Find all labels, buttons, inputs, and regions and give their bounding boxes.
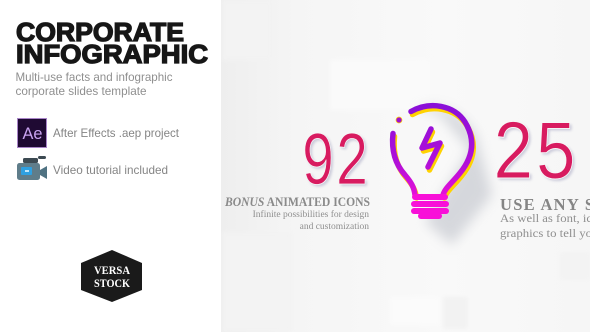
number 92: 92: [301, 121, 369, 207]
title: INFOGRAPHIC: [16, 41, 208, 69]
description text: and customization: [300, 222, 369, 232]
bulb yellow offset: [394, 109, 473, 198]
title: CORPORATE: [16, 19, 184, 47]
panel: left info sidebar: [0, 0, 221, 332]
description text: [253, 209, 369, 232]
bulb outline: [393, 106, 472, 195]
icon: After Effects: [18, 118, 46, 148]
icon: After Effects: Ae: [22, 124, 42, 143]
bulb spark dot: [396, 117, 402, 123]
stat: 92: [224, 121, 371, 232]
logo: Versa Stock: VERSA: [94, 265, 131, 277]
text: video tutorial: Video tutorial included: [53, 163, 168, 177]
description text: As well as font, ic: [500, 211, 590, 225]
title: [16, 19, 208, 69]
bulb screw base: [414, 197, 446, 216]
description text: [500, 211, 590, 240]
heading: bonus animated icons: BONUS ANIMATED ICONS: [224, 194, 370, 209]
subtitle text: Multi-use facts and infographic: [16, 70, 172, 84]
subtitle text: [16, 70, 172, 98]
panel: slide background: [221, 0, 590, 332]
icon: video camera: [17, 156, 47, 180]
logo: Versa Stock: STOCK: [94, 278, 130, 290]
text: After Effects project: After Effects .aep project: [53, 126, 180, 140]
number 25: 25: [492, 109, 577, 204]
bulb long shadow: [415, 107, 492, 245]
description text: Infinite possibilities for design: [253, 209, 369, 220]
description text: graphics to tell yo: [500, 226, 590, 240]
number 92: 92: [303, 123, 371, 209]
subtitle text: corporate slides template: [16, 84, 147, 98]
logo: Versa Stock: [81, 250, 142, 302]
icon: light bulb: [393, 106, 473, 216]
stat: 25: [492, 109, 590, 240]
